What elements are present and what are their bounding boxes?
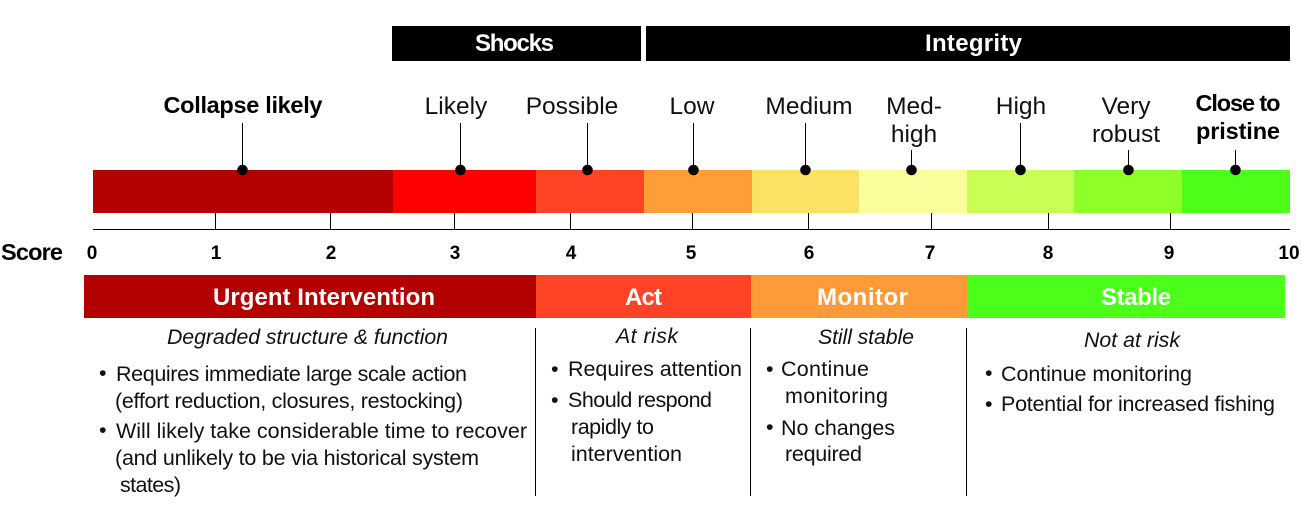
score numbers: 1 bbox=[211, 243, 222, 264]
band: Act: Act bbox=[625, 284, 662, 311]
score numbers: 4 bbox=[566, 243, 577, 264]
colour scale bar bbox=[93, 170, 1290, 213]
score numbers: 2 bbox=[326, 243, 336, 264]
header: Shocks bbox=[392, 26, 641, 61]
column: urgent intervention text: (and unlikely to be via historical system bbox=[115, 446, 479, 470]
status labels: Possible bbox=[526, 93, 618, 120]
column: urgent intervention text: • bbox=[99, 361, 107, 385]
column: stable text: Not at risk bbox=[1084, 328, 1181, 352]
column: monitor text: monitoring bbox=[785, 384, 888, 408]
header: Integrity bbox=[646, 26, 1290, 61]
marker pins bbox=[238, 123, 1240, 175]
band: Stable bbox=[967, 275, 1285, 318]
status labels: Close to bbox=[1196, 90, 1280, 116]
column dividers bbox=[536, 328, 966, 496]
score numbers: 3 bbox=[450, 243, 460, 264]
band: Monitor: Monitor bbox=[817, 284, 908, 311]
column: monitor text: • bbox=[766, 415, 774, 439]
score label: Score bbox=[1, 239, 63, 265]
score numbers: 6 bbox=[804, 243, 814, 264]
score numbers: 10 bbox=[1278, 243, 1300, 264]
band: Monitor bbox=[751, 275, 967, 318]
status labels: robust bbox=[1092, 121, 1160, 148]
score numbers: 0 bbox=[87, 243, 97, 264]
score numbers bbox=[87, 243, 1300, 264]
column: act text: At risk bbox=[614, 324, 679, 348]
status labels: Collapse likely bbox=[164, 92, 322, 118]
column: urgent intervention text: Degraded structure & function bbox=[167, 325, 448, 349]
status labels bbox=[164, 90, 1280, 148]
column: act text: Should respond bbox=[568, 388, 712, 412]
column: stable text bbox=[985, 328, 1275, 416]
band: Act bbox=[536, 275, 751, 318]
band: Urgent Intervention: Urgent Intervention bbox=[213, 284, 435, 311]
status labels: high bbox=[891, 121, 937, 148]
status labels: Med- bbox=[886, 93, 942, 120]
column: act text: rapidly to bbox=[571, 415, 654, 439]
band: Urgent Intervention bbox=[84, 275, 536, 318]
status labels: High bbox=[996, 93, 1046, 120]
status labels: Medium bbox=[765, 93, 853, 120]
score numbers: 5 bbox=[686, 243, 697, 264]
column: stable text: • bbox=[985, 361, 993, 385]
column: monitor text: required bbox=[785, 442, 862, 466]
column: act text: Requires attention bbox=[568, 357, 742, 381]
status labels: Low bbox=[670, 93, 715, 120]
score numbers: 9 bbox=[1164, 243, 1174, 264]
score numbers: 8 bbox=[1043, 243, 1053, 264]
column: act text bbox=[551, 324, 742, 466]
column: act text: intervention bbox=[571, 442, 682, 466]
column: urgent intervention text: • bbox=[99, 418, 107, 442]
status labels: Very bbox=[1101, 93, 1151, 120]
column: urgent intervention text bbox=[99, 325, 527, 497]
column: monitor text: Still stable bbox=[818, 325, 914, 349]
status labels: Likely bbox=[425, 93, 488, 120]
column: stable text: • bbox=[985, 392, 993, 416]
column: urgent intervention text: states) bbox=[120, 473, 181, 497]
column: urgent intervention text: Will likely take considerable time to recover bbox=[116, 419, 527, 443]
column: monitor text: • bbox=[766, 357, 774, 381]
score axis bbox=[93, 213, 1290, 230]
column: monitor text: Continue bbox=[781, 357, 869, 381]
column: stable text: Continue monitoring bbox=[1001, 362, 1192, 386]
status labels: pristine bbox=[1196, 118, 1280, 144]
column: urgent intervention text: Requires immediate large scale action bbox=[116, 362, 467, 386]
score numbers: 7 bbox=[925, 243, 935, 264]
column: stable text: Potential for increased fishing bbox=[1001, 392, 1275, 416]
column: act text: • bbox=[551, 357, 559, 381]
column: act text: • bbox=[551, 388, 559, 412]
header: Integrity: Integrity bbox=[925, 30, 1023, 57]
column: monitor text bbox=[766, 325, 914, 466]
header: Shocks: Shocks bbox=[475, 30, 554, 57]
band: Stable: Stable bbox=[1101, 284, 1171, 311]
column: monitor text: No changes bbox=[781, 416, 895, 440]
column: urgent intervention text: (effort reduction, closures, restocking) bbox=[115, 389, 463, 413]
